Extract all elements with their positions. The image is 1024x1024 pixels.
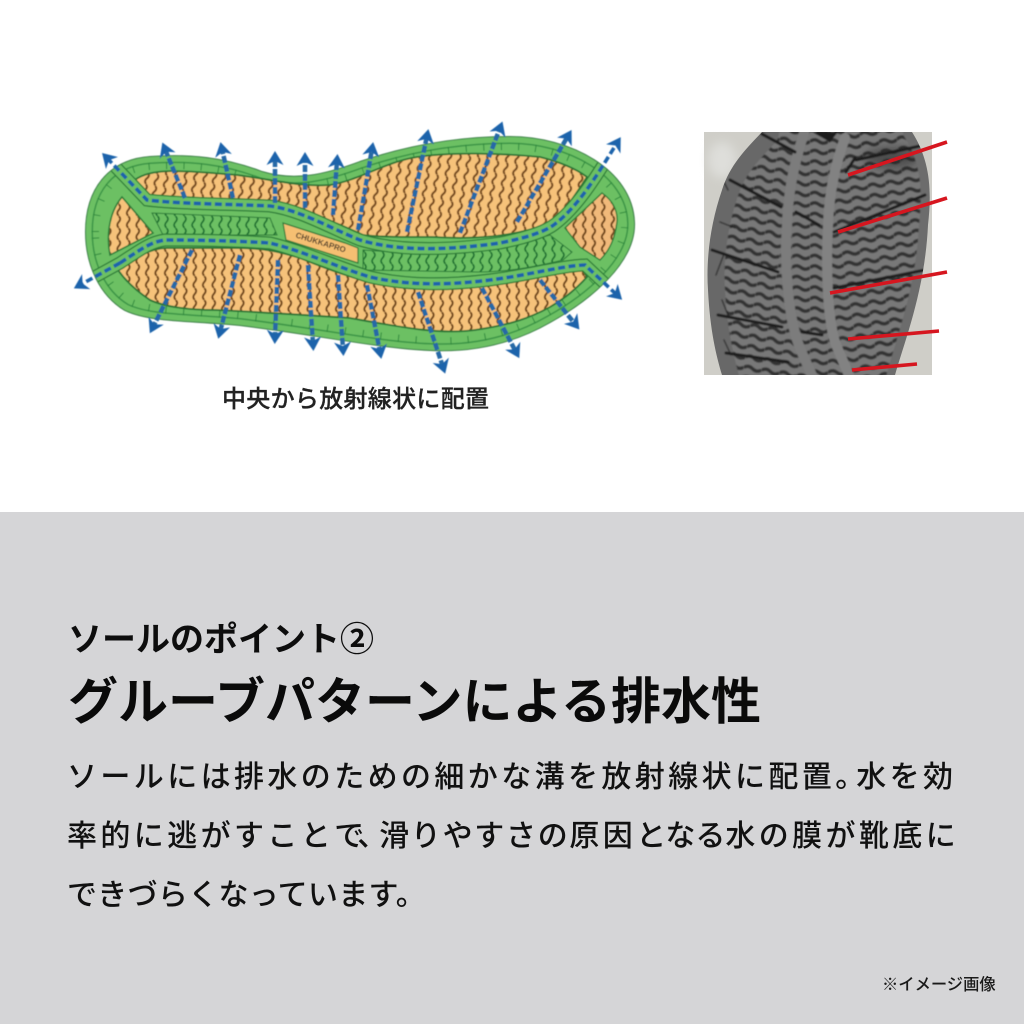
body text <box>67 761 959 912</box>
tan tread: upper <box>135 154 587 238</box>
heading: グルーブパターンによる排水性 <box>68 674 761 730</box>
illustration: sole groove diagram <box>73 121 948 375</box>
brand label plate: CHUKKAPRO <box>295 231 347 255</box>
subheading: ソールのポイント② <box>68 621 374 659</box>
channel dashes <box>107 143 617 249</box>
red indicator lines <box>830 142 947 370</box>
photo: shoe sole with red groove lines <box>700 130 947 378</box>
tan tread: toe <box>565 193 617 260</box>
sole outer rim <box>86 137 634 350</box>
caption: radial layout: 中央から放射線状に配置 <box>222 386 489 413</box>
body text: 率的に逃がすことで、滑りやすさの原因となる水の膜が靴底に <box>67 820 959 853</box>
tan tread: lower <box>118 248 587 332</box>
water channels <box>80 143 617 295</box>
brand label plate <box>283 223 358 263</box>
green centre tread: rear <box>152 213 277 235</box>
photo sole <box>700 130 935 378</box>
panel: bottom grey text panel <box>0 512 1024 1024</box>
body text: ソールには排水のための細かな溝を放射線状に配置。水を効 <box>67 761 956 794</box>
body text: できづらくなっています。 <box>67 879 426 912</box>
green channel beds <box>92 162 608 291</box>
footnote: ※イメージ画像 <box>882 976 996 994</box>
tan tread: heel <box>108 197 153 255</box>
green centre tread: front <box>363 235 572 272</box>
radial drainage arrows <box>153 128 575 367</box>
sole diagram <box>80 128 634 367</box>
photo background <box>704 132 932 375</box>
